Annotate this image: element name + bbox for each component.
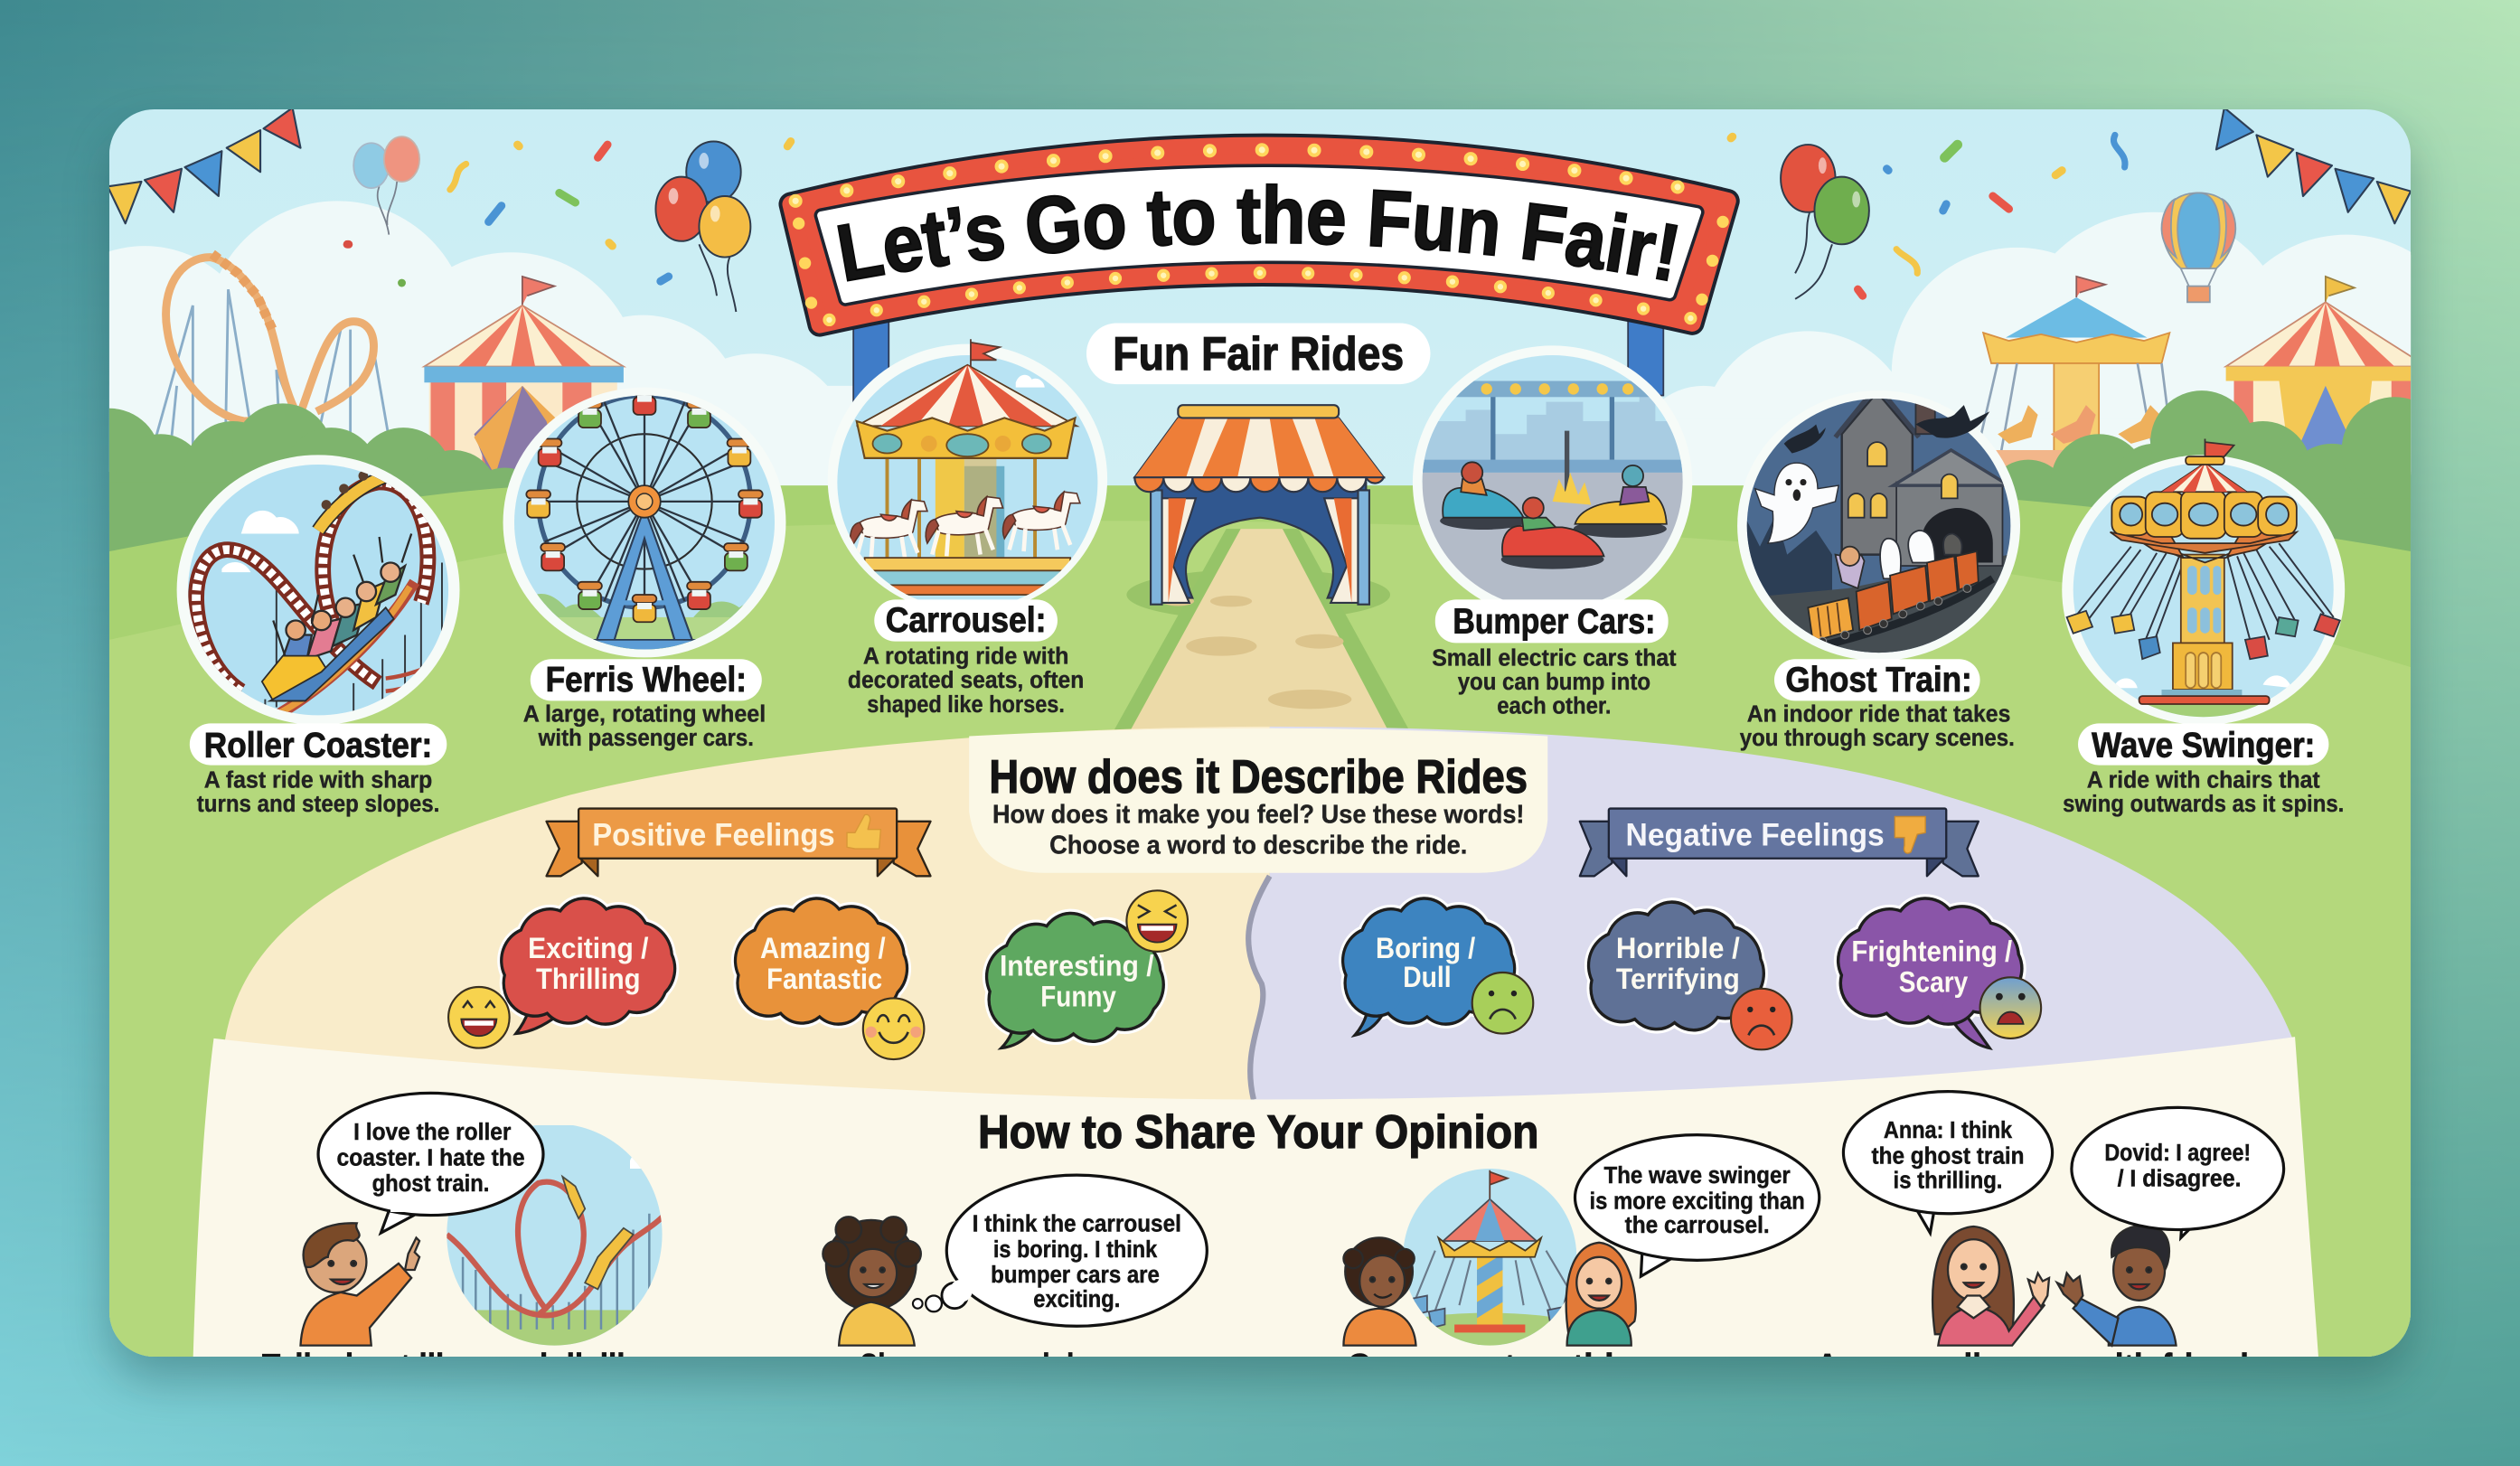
- opinion 2: share your opinion: [823, 1175, 1207, 1346]
- confetti: [347, 135, 2125, 296]
- thought bubble: I think the carrousel: [973, 1211, 1181, 1236]
- ride: ferris wheel: A large, rotating wheel: [523, 702, 766, 728]
- banner: negative feelings: Negative Feelings: [1626, 816, 1885, 852]
- ride: carrousel: A rotating ride with: [863, 644, 1068, 670]
- balloons colourful right: [1781, 145, 1869, 299]
- panel: how to share: [193, 1037, 2319, 1367]
- speech bubble: [1575, 1135, 1819, 1276]
- icon: angry red face: [1731, 989, 1792, 1049]
- speech bubble: ghost train.: [372, 1171, 489, 1197]
- bubble: boring: [1343, 898, 1533, 1035]
- bunting left: [108, 108, 300, 223]
- ride: wave swinger: Wave Swinger:: [2092, 727, 2315, 766]
- ride: roller coaster: Roller Coaster:: [204, 727, 432, 766]
- ride: wave swinger: [2062, 439, 2346, 817]
- ride: carrousel: shaped like horses.: [867, 692, 1065, 718]
- bubble: amazing: Amazing /: [760, 932, 886, 964]
- ride: carrousel: Carrousel:: [886, 601, 1047, 640]
- entrance tent gate: [1134, 405, 1384, 605]
- panel: describe rides header: How does it Describe Rides: [989, 750, 1528, 803]
- bubble: amazing: Fantastic: [766, 963, 882, 995]
- bushes: [108, 390, 2412, 551]
- speech bubble: The wave swinger: [1604, 1163, 1791, 1189]
- hot air balloon: [2161, 193, 2235, 302]
- speech bubble: Anna: [1843, 1092, 2053, 1233]
- ride: bumper cars: [1413, 345, 1696, 719]
- bubble: boring: Boring /: [1376, 932, 1475, 964]
- panel: describe rides header: [969, 728, 1547, 873]
- clipped captions at the bottom edge: Talk about likes and dislikes: [262, 1347, 667, 1390]
- bubble: exciting: Exciting /: [528, 932, 649, 964]
- bubble: boring: Dull: [1403, 961, 1452, 993]
- balloons pale left: [353, 136, 419, 235]
- bubble: interesting: [987, 890, 1188, 1048]
- speech bubble: the carrousel.: [1625, 1213, 1770, 1238]
- ride: bumper cars: Bumper Cars:: [1453, 603, 1655, 642]
- ride: roller coaster: A fast ride with sharp: [204, 767, 432, 793]
- speech bubble: is more exciting than: [1590, 1189, 1805, 1214]
- title marquee: [778, 134, 1740, 337]
- bubble: frightening: Frightening /: [1851, 935, 2012, 968]
- ride: ghost train: you through scary scenes.: [1740, 726, 2015, 751]
- bubble: exciting: Thrilling: [536, 963, 641, 995]
- bubble: exciting: [448, 898, 675, 1048]
- ride: roller coaster: turns and steep slopes.: [197, 792, 439, 817]
- speech bubble: David: / I disagree.: [2118, 1167, 2242, 1192]
- heading: Fun Fair Rides: Fun Fair Rides: [1113, 327, 1404, 380]
- background striped tent left: [424, 277, 624, 475]
- thought bubble: bumper cars are: [991, 1263, 1160, 1288]
- banner: positive feelings: [547, 809, 930, 876]
- opinion 4: agree or disagree: [1843, 1092, 2284, 1346]
- heading: how to share your opinion: How to Share Your Opinion: [978, 1105, 1538, 1158]
- bubble: frightening: [1838, 898, 2041, 1048]
- bunting right: [2216, 108, 2411, 223]
- background roller coaster: [155, 249, 389, 445]
- thought bubble: exciting.: [1033, 1287, 1120, 1312]
- divider: [1248, 876, 1270, 1099]
- person: pointing boy: [300, 1223, 419, 1346]
- person: girl with curly hair: [823, 1217, 921, 1346]
- speech bubble: David: Dovid: I agree!: [2104, 1141, 2251, 1166]
- panel: describe rides header: Choose a word to describe the ride.: [1049, 831, 1467, 860]
- bubble: amazing: [736, 898, 924, 1059]
- person: red haired girl: [1566, 1243, 1636, 1346]
- entrance path: [1109, 529, 1415, 739]
- panel: describe rides header: How does it make you feel? Use these words!: [992, 801, 1524, 830]
- opinion 1: likes and dislikes: [300, 1093, 665, 1350]
- bubble: horrible: [1589, 902, 1792, 1049]
- ride: ghost train: An indoor ride that takes: [1747, 702, 2010, 728]
- scene: coaster circle: [447, 1125, 665, 1350]
- bubble: interesting: Interesting /: [1000, 950, 1154, 982]
- ride: ghost train: [1735, 386, 2025, 751]
- speech bubble: I love the roller: [353, 1120, 511, 1145]
- clipped captions at the bottom edge: Share your opinion: [860, 1347, 1107, 1390]
- background striped tent right: [2224, 275, 2412, 450]
- bubble: frightening: Scary: [1899, 965, 1968, 998]
- ride: wave swinger: A ride with chairs that: [2087, 767, 2320, 793]
- title marquee: Let’s Go to the Fun Fair!: [837, 183, 1678, 282]
- speech bubble: Anna: is thrilling.: [1894, 1168, 2002, 1193]
- opinion 3: compare two things: [1343, 1135, 1819, 1350]
- speech bubble: coaster. I hate the: [337, 1145, 525, 1170]
- ride: carrousel: decorated seats, often: [848, 668, 1084, 693]
- ride: bumper cars: each other.: [1497, 694, 1612, 719]
- background carousel right: [1980, 275, 2171, 468]
- person: David: [2057, 1226, 2176, 1346]
- icon: smiling face: [863, 998, 924, 1059]
- ride: ferris wheel: Ferris Wheel:: [546, 661, 747, 700]
- panel: negative region: [1248, 727, 2295, 1109]
- ride: ghost train: Ghost Train:: [1785, 661, 1972, 700]
- banner: negative feelings: [1580, 809, 1979, 876]
- thought bubble: [913, 1175, 1207, 1326]
- icon: scared face: [1980, 977, 2041, 1038]
- bubble: horrible: Horrible /: [1616, 932, 1740, 964]
- thought bubble: is boring. I think: [993, 1237, 1158, 1263]
- person: Anna: [1932, 1226, 2049, 1346]
- bubble: interesting: Funny: [1040, 980, 1116, 1012]
- speech bubble: [318, 1093, 543, 1233]
- ride: roller coaster: [177, 450, 466, 817]
- speech bubble: David: [2072, 1107, 2284, 1237]
- balloons colourful left: [655, 142, 750, 312]
- icon: laughing face: [1126, 890, 1188, 952]
- banner: positive feelings: Positive Feelings: [592, 816, 835, 852]
- panel: positive region: [225, 727, 1270, 1109]
- icon: happy face: [448, 987, 510, 1048]
- speech bubble: Anna: the ghost train: [1872, 1144, 2024, 1170]
- person: curly boy: [1343, 1237, 1415, 1346]
- icon: thumbs up: [847, 814, 880, 849]
- ride: bumper cars: you can bump into: [1458, 670, 1650, 695]
- speech bubble: Anna: Anna: I think: [1884, 1118, 2013, 1143]
- bubble: horrible: Terrifying: [1616, 963, 1740, 995]
- ride: wave swinger: swing outwards as it spins.: [2063, 792, 2344, 817]
- ride: carrousel: [828, 339, 1109, 718]
- clipped captions at the bottom edge: Agree or disagree with friends: [1816, 1347, 2266, 1390]
- arch posts: [853, 315, 1663, 411]
- icon: thumbs down: [1895, 816, 1925, 853]
- ride: ferris wheel: [498, 386, 787, 751]
- poster card: [108, 109, 2412, 1357]
- icon: sad green face: [1472, 973, 1533, 1034]
- clipped captions at the bottom edge: [262, 1347, 2266, 1390]
- grass hills: [109, 485, 2411, 1357]
- ride: ferris wheel: with passenger cars.: [538, 726, 754, 751]
- clipped captions at the bottom edge: Compare two things: [1347, 1347, 1675, 1390]
- ride: bumper cars: Small electric cars that: [1432, 645, 1677, 671]
- scene: swing ride circle: [1403, 1169, 1583, 1350]
